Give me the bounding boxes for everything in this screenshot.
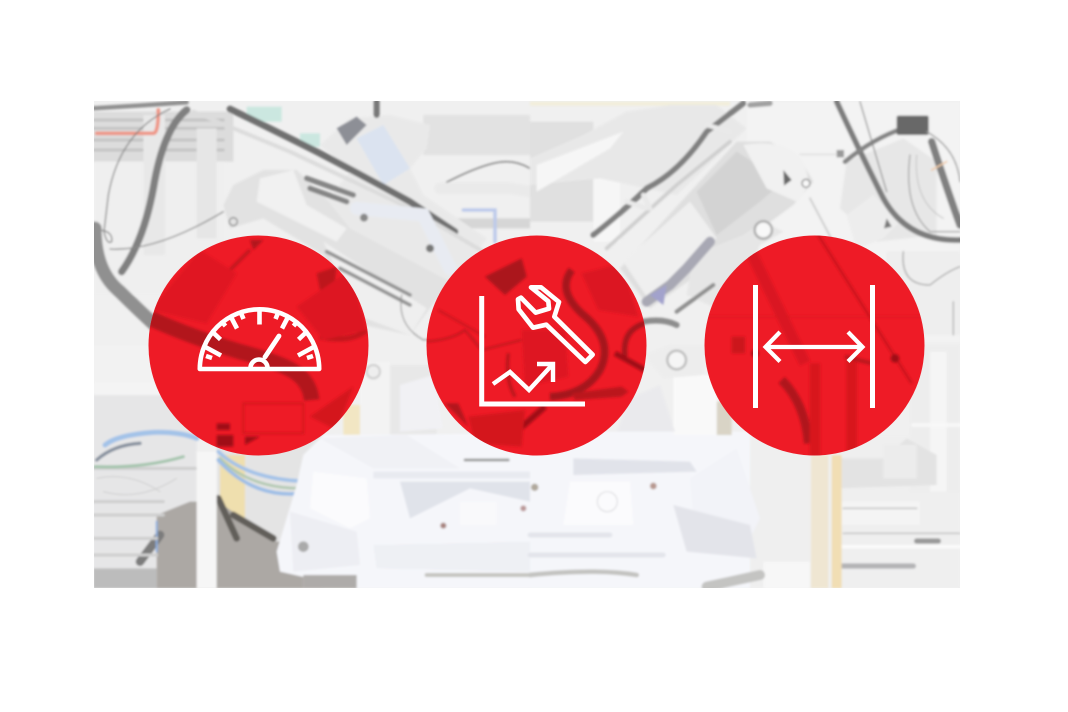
upper right of photo: [530, 102, 960, 342]
infographic canvas: [94, 101, 960, 588]
icon: double-headed arrow: [766, 332, 862, 362]
beige posts: [811, 455, 828, 588]
photo texture in circle 1: [150, 240, 367, 447]
background joint: [400, 376, 437, 431]
coloured cables: [105, 432, 197, 445]
main dark hose: [230, 109, 455, 232]
photo texture in circle 3: [705, 230, 925, 457]
right machinery: [750, 436, 783, 588]
circle 2: maintenance and performance: [425, 236, 646, 456]
dark machinery base: [157, 502, 303, 588]
photo texture in circle 2: [425, 258, 645, 447]
lower joint machinery: [688, 228, 781, 304]
icon: wrench: [518, 287, 593, 362]
right side machinery and cables: [840, 138, 937, 242]
background upper robot: [330, 116, 470, 252]
icon: trend arrow: [493, 364, 553, 390]
right robot arm: [620, 142, 813, 308]
car body detail: [573, 458, 697, 475]
upper left of photo: [93, 102, 530, 340]
circle 3: width and range: [704, 230, 925, 457]
arm body: [223, 170, 450, 335]
panel lines: [93, 468, 197, 555]
lower right of photo: [530, 345, 960, 588]
circle 1: speed gauge: [148, 236, 368, 456]
lower left of photo: [93, 345, 530, 588]
background photo: robotic car assembly line: [93, 101, 960, 588]
icon: speedometer: [200, 309, 319, 369]
icon: right boundary line: [870, 285, 875, 408]
car body: [277, 433, 530, 588]
icon: rising chart axes: [482, 296, 585, 404]
icon: left boundary line: [753, 285, 758, 408]
